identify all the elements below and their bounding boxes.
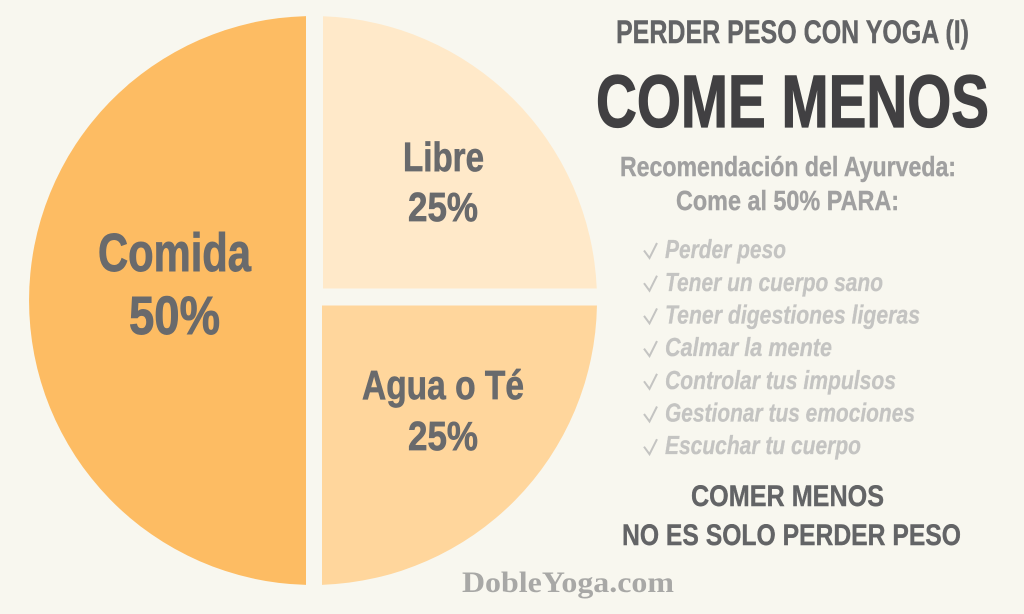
label: Agua o Té 25% xyxy=(362,362,524,459)
subheading: Come al 50% PARA: xyxy=(676,185,899,216)
item: Perder peso: Perder peso xyxy=(665,234,786,264)
slice: Comida 50% xyxy=(29,16,306,585)
label: Agua o Té 25%: Agua o Té xyxy=(362,362,524,408)
label: Comida 50%: Comida xyxy=(98,223,252,283)
item: Controlar tus impulsos: Controlar tus impulsos xyxy=(665,365,896,395)
closing statement xyxy=(622,480,961,552)
label: Comida 50%: 50% xyxy=(129,286,220,346)
item: Tener un cuerpo sano: Tener un cuerpo sano xyxy=(665,267,883,297)
closing statement: COMER MENOS xyxy=(691,480,884,513)
checklist xyxy=(644,234,920,460)
subheading: Recomendación del Ayurveda: xyxy=(620,151,956,182)
label: Libre 25%: Libre xyxy=(403,134,484,180)
label: Comida 50% xyxy=(98,223,252,346)
label: Agua o Té 25%: 25% xyxy=(408,413,478,459)
slice: Agua o Té 25% xyxy=(322,306,597,585)
item: Escuchar tu cuerpo: Escuchar tu cuerpo xyxy=(665,430,861,460)
website credit: DobleYoga.com xyxy=(462,566,674,599)
pie chart xyxy=(29,16,597,585)
item: Gestionar tus emociones: Gestionar tus emociones xyxy=(665,398,915,428)
item: Calmar la mente: Calmar la mente xyxy=(665,332,832,362)
label: Libre 25%: 25% xyxy=(408,184,478,230)
subheading xyxy=(620,151,956,216)
closing statement: NO ES SOLO PERDER PESO xyxy=(622,519,961,552)
item: Tener digestiones ligeras: Tener digestiones ligeras xyxy=(665,300,920,330)
label: Libre 25% xyxy=(403,134,484,230)
slice: Libre 25% xyxy=(323,16,597,288)
